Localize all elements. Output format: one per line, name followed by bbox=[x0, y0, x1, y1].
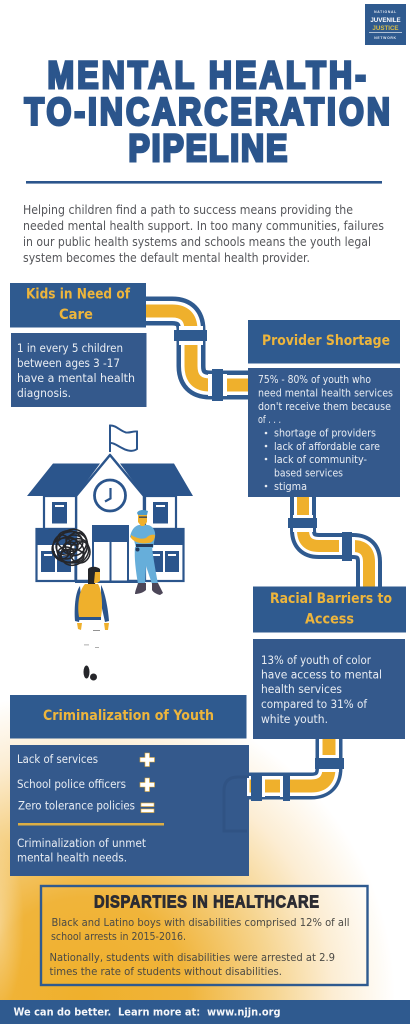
text block: criminalization equation: Zero tolerance policies bbox=[18, 798, 135, 812]
shirt bbox=[130, 525, 155, 548]
head bbox=[138, 514, 147, 526]
heading: provider shortage: Provider Shortage bbox=[262, 333, 390, 349]
text block: disparities statistics: Nationally, students with disabilities were arrested at 2.9 bbox=[50, 951, 335, 964]
text block: provider statistic and list: lack of community- bbox=[274, 453, 367, 466]
title: TO-INCARCERATION bbox=[24, 91, 390, 133]
text block: criminalization equation bbox=[10, 745, 250, 876]
intro text bbox=[23, 203, 384, 265]
logo: JUVENILE bbox=[370, 17, 401, 24]
lower right wing bbox=[145, 528, 184, 581]
text block: kids statistic: diagnosis. bbox=[17, 386, 71, 400]
heading: kids in need of care: Care bbox=[59, 307, 93, 323]
text block: kids statistic: have a mental health bbox=[17, 371, 135, 385]
intro text: needed mental health support. In too many communities, failures bbox=[23, 219, 384, 233]
faint pipe behind panel bbox=[224, 777, 249, 831]
icon: roof bbox=[27, 464, 193, 496]
icon: plus bbox=[140, 778, 154, 792]
boots bbox=[135, 583, 146, 594]
lower left wing bbox=[36, 528, 76, 581]
upper left wing bbox=[44, 496, 76, 529]
text block: provider statistic and list: stigma bbox=[274, 480, 307, 493]
panel: disparities in healthcare bbox=[41, 886, 368, 985]
heading: kids in need of care bbox=[10, 283, 146, 328]
text block: criminalization equation: School police officers bbox=[17, 777, 126, 791]
panel: racial barriers to access bbox=[253, 586, 406, 739]
text block: racial statistic: compared to 31% of bbox=[261, 697, 368, 711]
text block: provider statistic and list: based services bbox=[274, 466, 343, 480]
heading: kids in need of care: Kids in Need of bbox=[26, 286, 131, 302]
text block: provider statistic and list: need mental health services bbox=[258, 386, 393, 400]
crossed arms bbox=[131, 535, 155, 543]
upper right wing bbox=[145, 496, 176, 529]
text block: racial statistic: 13% of youth of color bbox=[261, 653, 371, 667]
heading: racial barriers: Racial Barriers to bbox=[270, 591, 392, 607]
text block: racial statistic bbox=[253, 639, 405, 739]
icon: tangled thought scribble bbox=[48, 524, 94, 571]
icon: clock bbox=[94, 480, 126, 511]
illustration: school police officer bbox=[130, 510, 163, 595]
heading: racial barriers: Access bbox=[305, 612, 354, 628]
text block: kids statistic: between ages 3 -17 bbox=[17, 356, 120, 370]
text block: provider statistic and list: 75% - 80% of youth who bbox=[258, 373, 371, 386]
pipe: kids to provider bbox=[144, 311, 250, 401]
heading: racial barriers bbox=[253, 586, 406, 632]
icon: door bbox=[75, 525, 145, 583]
title: PIPELINE bbox=[128, 127, 287, 170]
illustration: school bbox=[27, 425, 193, 583]
footer bbox=[0, 1000, 410, 1024]
panel: provider shortage bbox=[248, 320, 400, 497]
icon: equals bbox=[141, 803, 154, 812]
heading: provider shortage bbox=[248, 320, 400, 364]
intro text: in our public health systems and schools means the youth legal bbox=[23, 235, 371, 249]
text block: criminalization equation: Lack of services bbox=[17, 752, 98, 766]
text block: racial statistic: white youth. bbox=[261, 712, 328, 726]
logo bbox=[365, 4, 406, 45]
icon: plus bbox=[140, 753, 154, 766]
text block: racial statistic: health services bbox=[261, 682, 342, 696]
text block: criminalization equation: Criminalization of unmet bbox=[17, 836, 146, 850]
heading: criminalization: Criminalization of Youth bbox=[43, 708, 214, 724]
text block: kids statistic bbox=[11, 333, 146, 407]
pipe: racial barriers to criminalization bbox=[247, 737, 344, 801]
logo: JUSTICE bbox=[372, 25, 399, 32]
intro text: system becomes the default mental health provider. bbox=[23, 251, 310, 265]
legs bbox=[135, 547, 158, 584]
text block: kids statistic: 1 in every 5 children bbox=[17, 341, 123, 355]
footer: We can do better. Learn more at: www.njjn.org bbox=[14, 1006, 280, 1018]
text block: criminalization equation: mental health needs. bbox=[17, 850, 127, 864]
text block: provider statistic and list bbox=[248, 368, 400, 497]
icon: flag bbox=[110, 425, 137, 452]
logo: NATIONAL bbox=[374, 10, 397, 14]
intro text: Helping children find a path to success means providing the bbox=[23, 203, 353, 217]
text block: racial statistic: have access to mental bbox=[261, 668, 382, 682]
heading: criminalization bbox=[10, 695, 246, 738]
text block: disparities statistics bbox=[50, 916, 350, 978]
title: MENTAL HEALTH- bbox=[48, 54, 366, 96]
text block: disparities statistics: Black and Latino boys with disabilities comprised 12% of all bbox=[52, 916, 350, 929]
text block: provider statistic and list: shortage of providers bbox=[274, 426, 376, 440]
title bbox=[24, 54, 390, 170]
text block: provider statistic and list: of . . . bbox=[258, 413, 281, 426]
logo: NETWORK bbox=[374, 36, 397, 40]
panel: kids in need of care bbox=[10, 283, 146, 407]
text block: provider statistic and list: don't receive them because bbox=[258, 400, 391, 413]
text block: disparities statistics: school arrests in 2015-2016. bbox=[51, 930, 186, 943]
text block: provider statistic and list: lack of affordable care bbox=[274, 440, 380, 453]
pipe: provider to racial barriers bbox=[288, 495, 369, 588]
illustration: student with backpack bbox=[75, 567, 109, 680]
panel: criminalization of youth bbox=[10, 695, 250, 876]
text block: disparities statistics: times the rate of students without disabilities. bbox=[50, 965, 282, 978]
heading: disparities: DISPARTIES IN HEALTHCARE bbox=[94, 892, 319, 912]
